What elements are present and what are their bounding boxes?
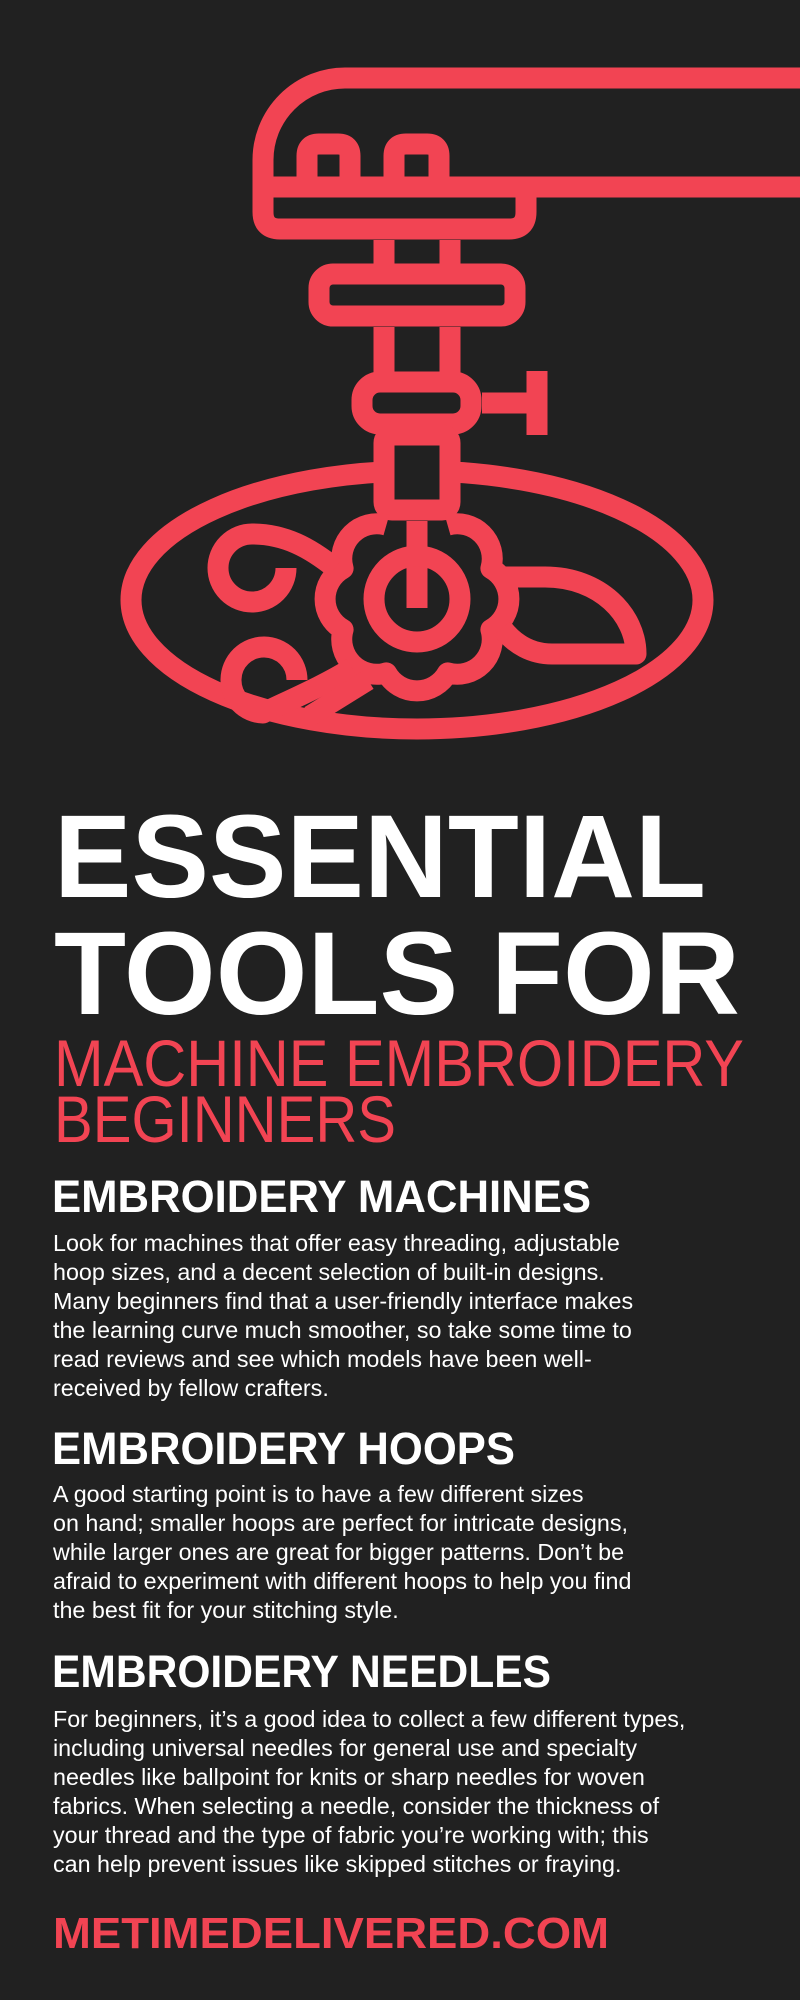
title: ESSENTIAL: [54, 791, 706, 923]
needle: [406, 521, 428, 608]
flower petals: [325, 524, 509, 691]
flower center: [374, 556, 460, 642]
hoop ellipse: [131, 471, 703, 729]
leaf: [500, 577, 636, 654]
section: embroidery needles: can help prevent issues like skipped stitches or fraying.: [53, 1851, 621, 1877]
swirls: [218, 534, 335, 602]
title: [54, 791, 744, 1156]
machine arm: [263, 78, 800, 229]
section: embroidery needles: For beginners, it’s a good idea to collect a few different types,: [53, 1706, 685, 1732]
section: embroidery machines: [52, 1171, 633, 1401]
section: embroidery hoops: afraid to experiment with different hoops to help you find: [53, 1568, 631, 1594]
section: embroidery machines: EMBROIDERY MACHINES: [52, 1171, 591, 1222]
section: embroidery machines: the learning curve much smoother, so take some time to: [53, 1317, 632, 1343]
section: embroidery hoops: while larger ones are great for bigger patterns. Don’t be: [52, 1539, 624, 1565]
section: embroidery needles: fabrics. When selecting a needle, consider the thickness of: [53, 1793, 660, 1819]
section: embroidery machines: received by fellow crafters.: [53, 1375, 329, 1401]
title: BEGINNERS: [54, 1082, 396, 1156]
section: embroidery hoops: [52, 1423, 631, 1623]
thread spools: [307, 144, 350, 187]
section: embroidery hoops: EMBROIDERY HOOPS: [52, 1423, 515, 1474]
section: embroidery needles: [52, 1646, 685, 1877]
section: embroidery needles: including universal needles for general use and specialty: [53, 1735, 637, 1761]
lower shaft: [384, 435, 450, 510]
subtitle: MACHINE EMBROIDERY: [54, 1026, 744, 1100]
section: embroidery machines: Many beginners find that a user-friendly interface makes: [53, 1288, 633, 1314]
section: embroidery needles: needles like ballpoint for knits or sharp needles for woven: [53, 1764, 645, 1790]
collar with screw: [362, 382, 471, 424]
title: TOOLS FOR: [54, 908, 740, 1040]
footer url: METIMEDELIVERED.COM: [53, 1909, 609, 1958]
section: embroidery machines: Look for machines that offer easy threading, adjustable: [53, 1230, 620, 1256]
section: embroidery machines: hoop sizes, and a decent selection of built-in designs.: [53, 1259, 605, 1285]
section: embroidery hoops: A good starting point is to have a few different sizes: [53, 1481, 584, 1507]
icon: embroidery machine: [131, 78, 800, 729]
section: embroidery machines: read reviews and see which models have been well-: [53, 1346, 592, 1372]
upper shaft: [384, 240, 450, 274]
section: embroidery needles: EMBROIDERY NEEDLES: [52, 1646, 551, 1697]
section: embroidery hoops: the best fit for your stitching style.: [53, 1597, 399, 1623]
section: embroidery hoops: on hand; smaller hoops are perfect for intricate designs,: [53, 1510, 628, 1536]
section: embroidery needles: your thread and the type of fabric you’re working with; this: [53, 1822, 649, 1848]
